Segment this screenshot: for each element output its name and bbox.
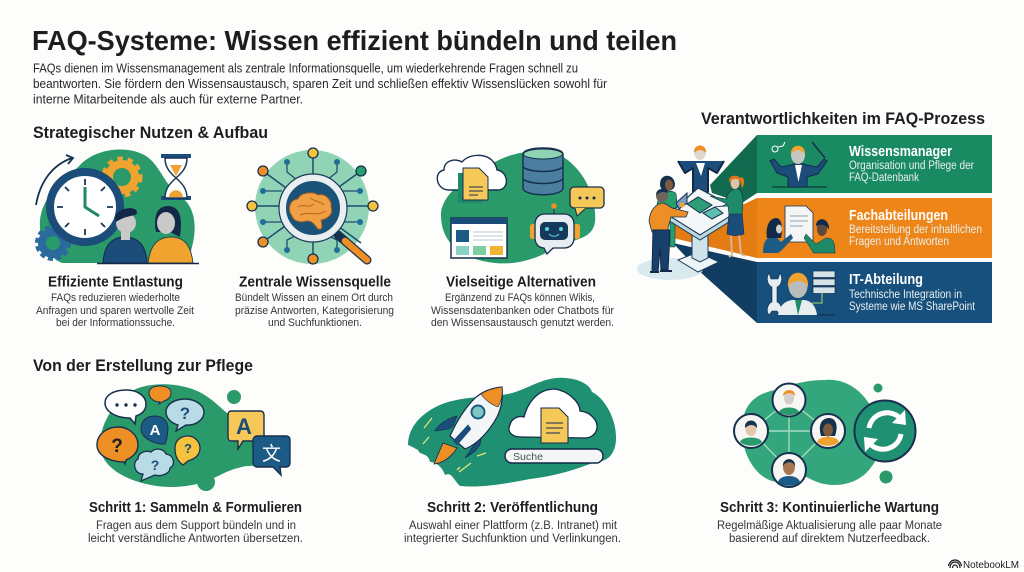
panel: responsibilities	[637, 110, 992, 323]
icon: clock, gears and people	[36, 150, 199, 264]
intro text	[33, 62, 607, 106]
panel: step 2	[404, 378, 621, 545]
description: step 1	[88, 520, 303, 545]
text: IT department: IT-Abteilung	[849, 272, 923, 288]
panel: versatile alternatives	[431, 148, 614, 329]
title: FAQ-Systeme: Wissen effizient bündeln und teilen	[32, 25, 677, 56]
icon: rocket, cloud document and search bar	[408, 378, 616, 487]
description: step 3: basierend auf direktem Nutzerfeedback.	[729, 533, 930, 545]
intro text: beantworten. Sie fördern den Wissensaustausch, sparen Zeit und schließen effektiv Wissenslücken sowohl für	[33, 77, 607, 91]
heading: step 2: Schritt 2: Veröffentlichung	[427, 500, 598, 516]
description: versatile alternatives: Ergänzend zu FAQs können Wikis,	[445, 292, 595, 304]
logo: NotebookLM: NotebookLM	[963, 560, 1019, 571]
heading: step 1: Schritt 1: Sammeln & Formulieren	[89, 500, 302, 516]
description: efficient relief: bei der Informationssuche.	[56, 317, 175, 329]
icon: conductor	[770, 142, 827, 187]
icon: question bubbles and translation: 文	[262, 443, 281, 465]
heading: step 3: Schritt 3: Kontinuierliche Wartung	[720, 500, 939, 516]
panel: central knowledge source	[235, 148, 394, 329]
icon: two people with a document	[763, 206, 835, 253]
icon: question bubbles and translation: ?	[180, 404, 190, 423]
text: knowledge manager: Organisation und Pflege der	[849, 160, 974, 172]
description: versatile alternatives	[431, 292, 614, 329]
description: versatile alternatives: Wissensdatenbanken oder Chatbots für	[431, 305, 614, 317]
heading: efficient relief: Effiziente Entlastung	[48, 274, 183, 290]
icon: question bubbles and translation: ?	[111, 436, 123, 457]
panel: efficient relief	[36, 150, 199, 329]
intro text: FAQs dienen im Wissensmanagement als zentrale Informationsquelle, um wiederkehrende Fragen schnell zu	[33, 62, 578, 76]
icon: question bubbles and translation: A	[150, 422, 161, 439]
text: IT department	[849, 272, 976, 313]
heading: responsibilities: Verantwortlichkeiten im FAQ-Prozess	[701, 110, 985, 128]
description: versatile alternatives: den Wissensaustausch genutzt werden.	[431, 317, 614, 329]
description: central knowledge source: präzise Antworten, Kategorisierung	[235, 305, 394, 317]
text: knowledge manager	[849, 144, 974, 184]
text: IT department: Technische Integration in	[849, 289, 962, 301]
icon: question bubbles and translation	[97, 384, 290, 491]
text: departments: Fachabteilungen	[849, 208, 948, 224]
description: efficient relief: FAQs reduzieren wiederholte	[51, 292, 180, 304]
description: step 2: integrierter Suchfunktion und Verlinkungen.	[404, 533, 621, 545]
description: step 3: Regelmäßige Aktualisierung alle paar Monate	[717, 520, 942, 532]
text: IT department: Systeme wie MS SharePoint	[849, 301, 976, 313]
icon: question bubbles and translation: ?	[151, 457, 159, 473]
text: knowledge manager: Wissensmanager	[849, 144, 952, 160]
icon: brain under magnifier	[247, 148, 378, 264]
text: departments: Fragen und Antworten	[849, 236, 949, 248]
heading: central knowledge source: Zentrale Wissensquelle	[239, 274, 391, 290]
icon: question bubbles and translation: A	[236, 414, 252, 439]
band: departments	[757, 198, 992, 258]
description: step 1: Fragen aus dem Support bündeln und in	[96, 520, 296, 532]
icon: team around a table	[637, 135, 757, 323]
icon: question bubbles and translation: ?	[184, 441, 192, 456]
panel: step 3	[717, 380, 942, 545]
icon: cloud, database, bot and web page	[437, 148, 604, 263]
text: departments: Bereitstellung der inhaltlichen	[849, 224, 982, 236]
intro text: interne Mitarbeitende als auch für externe Partner.	[33, 92, 303, 106]
description: step 2	[404, 520, 621, 545]
description: step 2: Auswahl einer Plattform (z.B. Intranet) mit	[409, 520, 618, 532]
description: central knowledge source: Bündelt Wissen an einem Ort durch	[235, 292, 393, 304]
icon: connected users and refresh cycle	[734, 380, 916, 487]
band: knowledge manager	[757, 135, 992, 193]
description: step 1: leicht verständliche Antworten übersetzen.	[88, 533, 303, 545]
description: efficient relief: Anfragen und sparen wertvolle Zeit	[36, 305, 194, 317]
text: knowledge manager: FAQ-Datenbank	[849, 172, 919, 184]
icon: rocket, cloud document and search bar: Suche	[513, 451, 543, 463]
description: central knowledge source	[235, 292, 394, 329]
band: IT department	[757, 262, 992, 323]
panel: step 1	[88, 384, 303, 545]
description: central knowledge source: und Suchfunktionen.	[268, 317, 362, 329]
icon: technician with wrench and server	[767, 271, 835, 315]
heading: strategic benefit: Strategischer Nutzen & Aufbau	[33, 124, 268, 142]
text: departments	[849, 208, 982, 248]
heading: from creation to maintenance: Von der Erstellung zur Pflege	[33, 357, 253, 375]
description: step 3	[717, 520, 942, 545]
heading: versatile alternatives: Vielseitige Alternativen	[446, 274, 596, 290]
description: efficient relief	[36, 292, 194, 329]
